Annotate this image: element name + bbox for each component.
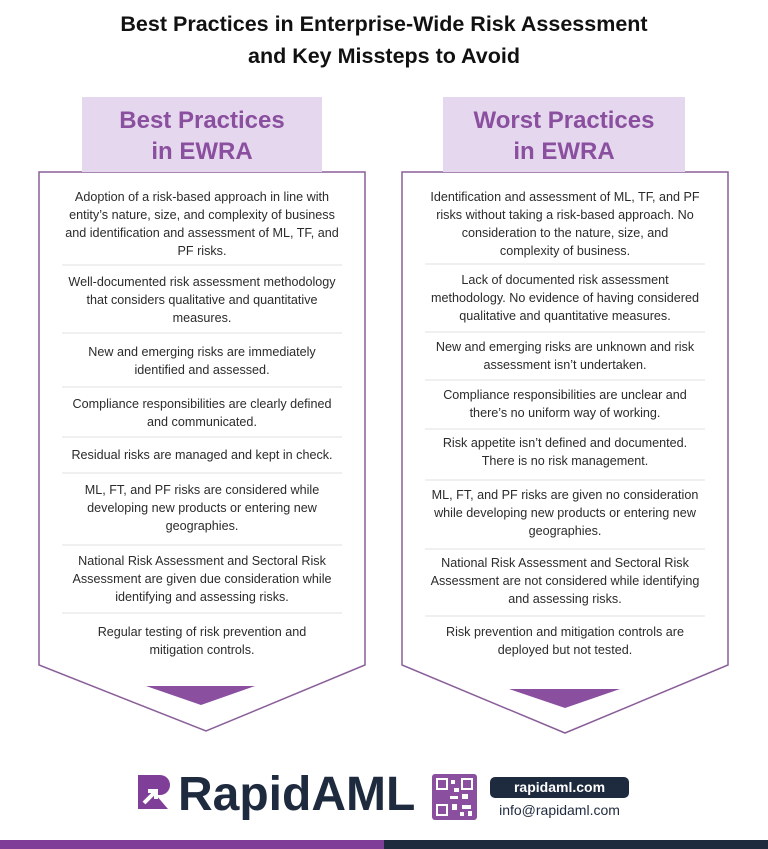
- text: Residual risks are managed and kept in check.: [71, 448, 333, 462]
- text: Risk prevention and mitigation controls are: [446, 625, 684, 639]
- header: worst practices: Worst Practices: [474, 107, 654, 134]
- header: best practices: in EWRA: [151, 138, 253, 165]
- text: assessment isn’t undertaken.: [483, 358, 647, 372]
- icon: logo mark: [138, 775, 170, 809]
- text: Regular testing of risk prevention and: [98, 625, 306, 639]
- text: New and emerging risks are unknown and risk: [436, 340, 694, 354]
- text: geographies.: [166, 519, 238, 533]
- header: worst practices: in EWRA: [513, 138, 615, 165]
- text: complexity of business.: [500, 244, 630, 258]
- text: National Risk Assessment and Sectoral Risk: [78, 554, 326, 568]
- header: worst practices: [443, 97, 685, 172]
- text: Well-documented risk assessment methodology: [68, 275, 336, 289]
- best practices list: [65, 190, 339, 657]
- title: [120, 12, 648, 68]
- text: methodology. No evidence of having considered: [431, 291, 699, 305]
- title: Best Practices in Enterprise-Wide Risk Assessment: [120, 12, 648, 36]
- contact: website pill: rapidaml.com: [514, 779, 605, 795]
- text: and communicated.: [147, 415, 257, 429]
- icon: QR code: [432, 774, 477, 820]
- contact: website pill: [490, 777, 629, 798]
- header: best practices: Best Practices: [119, 107, 285, 134]
- text: PF risks.: [178, 244, 226, 258]
- text: New and emerging risks are immediately: [88, 345, 316, 359]
- text: risks without taking a risk-based approach. No: [436, 208, 694, 222]
- text: There is no risk management.: [482, 454, 648, 468]
- contact: email: info@rapidaml.com: [499, 802, 620, 818]
- text: Identification and assessment of ML, TF, and PF: [430, 190, 700, 204]
- text: measures.: [173, 311, 231, 325]
- text: Risk appetite isn’t defined and documented.: [443, 436, 687, 450]
- header: best practices: [82, 97, 322, 172]
- text: identified and assessed.: [134, 363, 270, 377]
- text: Lack of documented risk assessment: [461, 273, 669, 287]
- text: Compliance responsibilities are clearly defined: [72, 397, 332, 411]
- text: qualitative and quantitative measures.: [459, 309, 671, 323]
- text: consideration to the nature, size, and: [462, 226, 668, 240]
- text: National Risk Assessment and Sectoral Risk: [441, 556, 689, 570]
- text: and assessing risks.: [508, 592, 622, 606]
- text: Adoption of a risk-based approach in line with: [75, 190, 329, 204]
- text: geographies.: [529, 524, 601, 538]
- text: that considers qualitative and quantitative: [86, 293, 318, 307]
- logo: RapidAML: [178, 768, 415, 821]
- text: there’s no uniform way of working.: [470, 406, 660, 420]
- text: Assessment are given due consideration while: [72, 572, 332, 586]
- text: Assessment are not considered while identifying: [431, 574, 699, 588]
- text: deployed but not tested.: [498, 643, 632, 657]
- text: entity’s nature, size, and complexity of business: [69, 208, 335, 222]
- text: identifying and assessing risks.: [115, 590, 289, 604]
- text: ML, FT, and PF risks are considered while: [85, 483, 319, 497]
- text: developing new products or entering new: [87, 501, 317, 515]
- text: ML, FT, and PF risks are given no consideration: [432, 488, 698, 502]
- title: and Key Missteps to Avoid: [248, 44, 520, 68]
- text: while developing new products or entering new: [434, 506, 696, 520]
- text: and identification and assessment of ML, TF, and: [65, 226, 339, 240]
- text: mitigation controls.: [150, 643, 254, 657]
- worst practices list: [430, 190, 700, 657]
- text: Compliance responsibilities are unclear and: [443, 388, 687, 402]
